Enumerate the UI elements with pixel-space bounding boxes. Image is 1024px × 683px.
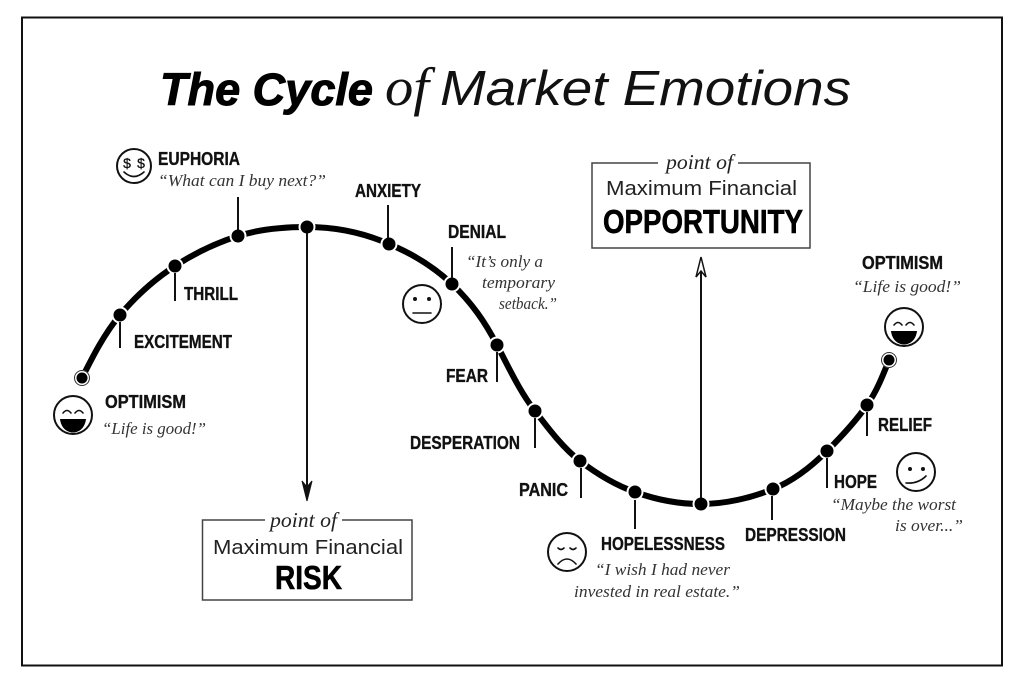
label: denial: “It’s only a (466, 252, 543, 271)
panel: maximum financial opportunity: Maximum Financial (606, 178, 797, 200)
title (160, 57, 851, 117)
panel: maximum financial opportunity: OPPORTUNITY (603, 203, 803, 240)
label: optimism left: “Life is good!” (102, 419, 206, 438)
label: hope: HOPE (834, 471, 877, 492)
icon: slight smile face (897, 453, 935, 491)
label: excitement: EXCITEMENT (134, 331, 233, 352)
label: hopelessness: “I wish I had never (595, 560, 730, 579)
label: optimism left: OPTIMISM (105, 391, 186, 412)
label: depression: DEPRESSION (745, 524, 846, 545)
label: optimism right: OPTIMISM (862, 252, 943, 273)
label: anxiety: ANXIETY (355, 180, 422, 201)
label: hope (831, 471, 963, 535)
label: euphoria (158, 148, 326, 190)
label: euphoria: EUPHORIA (158, 148, 240, 169)
label: hopelessness: HOPELESSNESS (601, 533, 725, 554)
arrow: maximum opportunity (696, 257, 706, 498)
icon: laughing face left (54, 396, 92, 434)
label: hope: “Maybe the worst (831, 495, 957, 514)
label: hopelessness (574, 533, 740, 601)
label: hope: is over...” (895, 516, 963, 535)
panel: maximum financial risk: Maximum Financial (213, 537, 403, 559)
label: euphoria: “What can I buy next?” (158, 171, 326, 190)
title: of (385, 57, 436, 117)
icon: laughing face right (885, 308, 923, 346)
icon: dollar eyes face (117, 149, 151, 183)
icon: dollar eyes face: $ (123, 155, 131, 171)
panel: maximum financial opportunity: point of (664, 150, 736, 174)
icon: sad face (548, 533, 586, 571)
icon: dollar eyes face: $ (137, 155, 145, 171)
label tick lines (120, 197, 867, 529)
label: hopelessness: invested in real estate.” (574, 582, 740, 601)
panel: maximum financial opportunity (592, 150, 810, 248)
label: relief: RELIEF (878, 414, 932, 435)
label: fear: FEAR (446, 365, 488, 386)
panel: maximum financial risk: RISK (275, 559, 342, 596)
label: denial (448, 221, 557, 313)
icon: neutral face (403, 285, 441, 323)
panel: maximum financial risk: point of (268, 508, 340, 532)
panel: maximum financial risk (202, 508, 412, 600)
label: desperation: DESPERATION (410, 432, 520, 453)
market emotion curve (74, 218, 897, 512)
label: thrill: THRILL (184, 283, 238, 304)
label: optimism right: “Life is good!” (853, 277, 961, 296)
label: denial: setback.” (499, 294, 557, 313)
title: The Cycle (160, 64, 373, 115)
label: denial: temporary (482, 273, 555, 292)
label: denial: DENIAL (448, 221, 506, 242)
label: optimism left (102, 391, 206, 438)
title: Market Emotions (440, 62, 851, 116)
label: panic: PANIC (519, 479, 568, 500)
arrow: maximum risk (302, 233, 312, 501)
curve nodes (74, 218, 897, 512)
label: optimism right (853, 252, 961, 296)
